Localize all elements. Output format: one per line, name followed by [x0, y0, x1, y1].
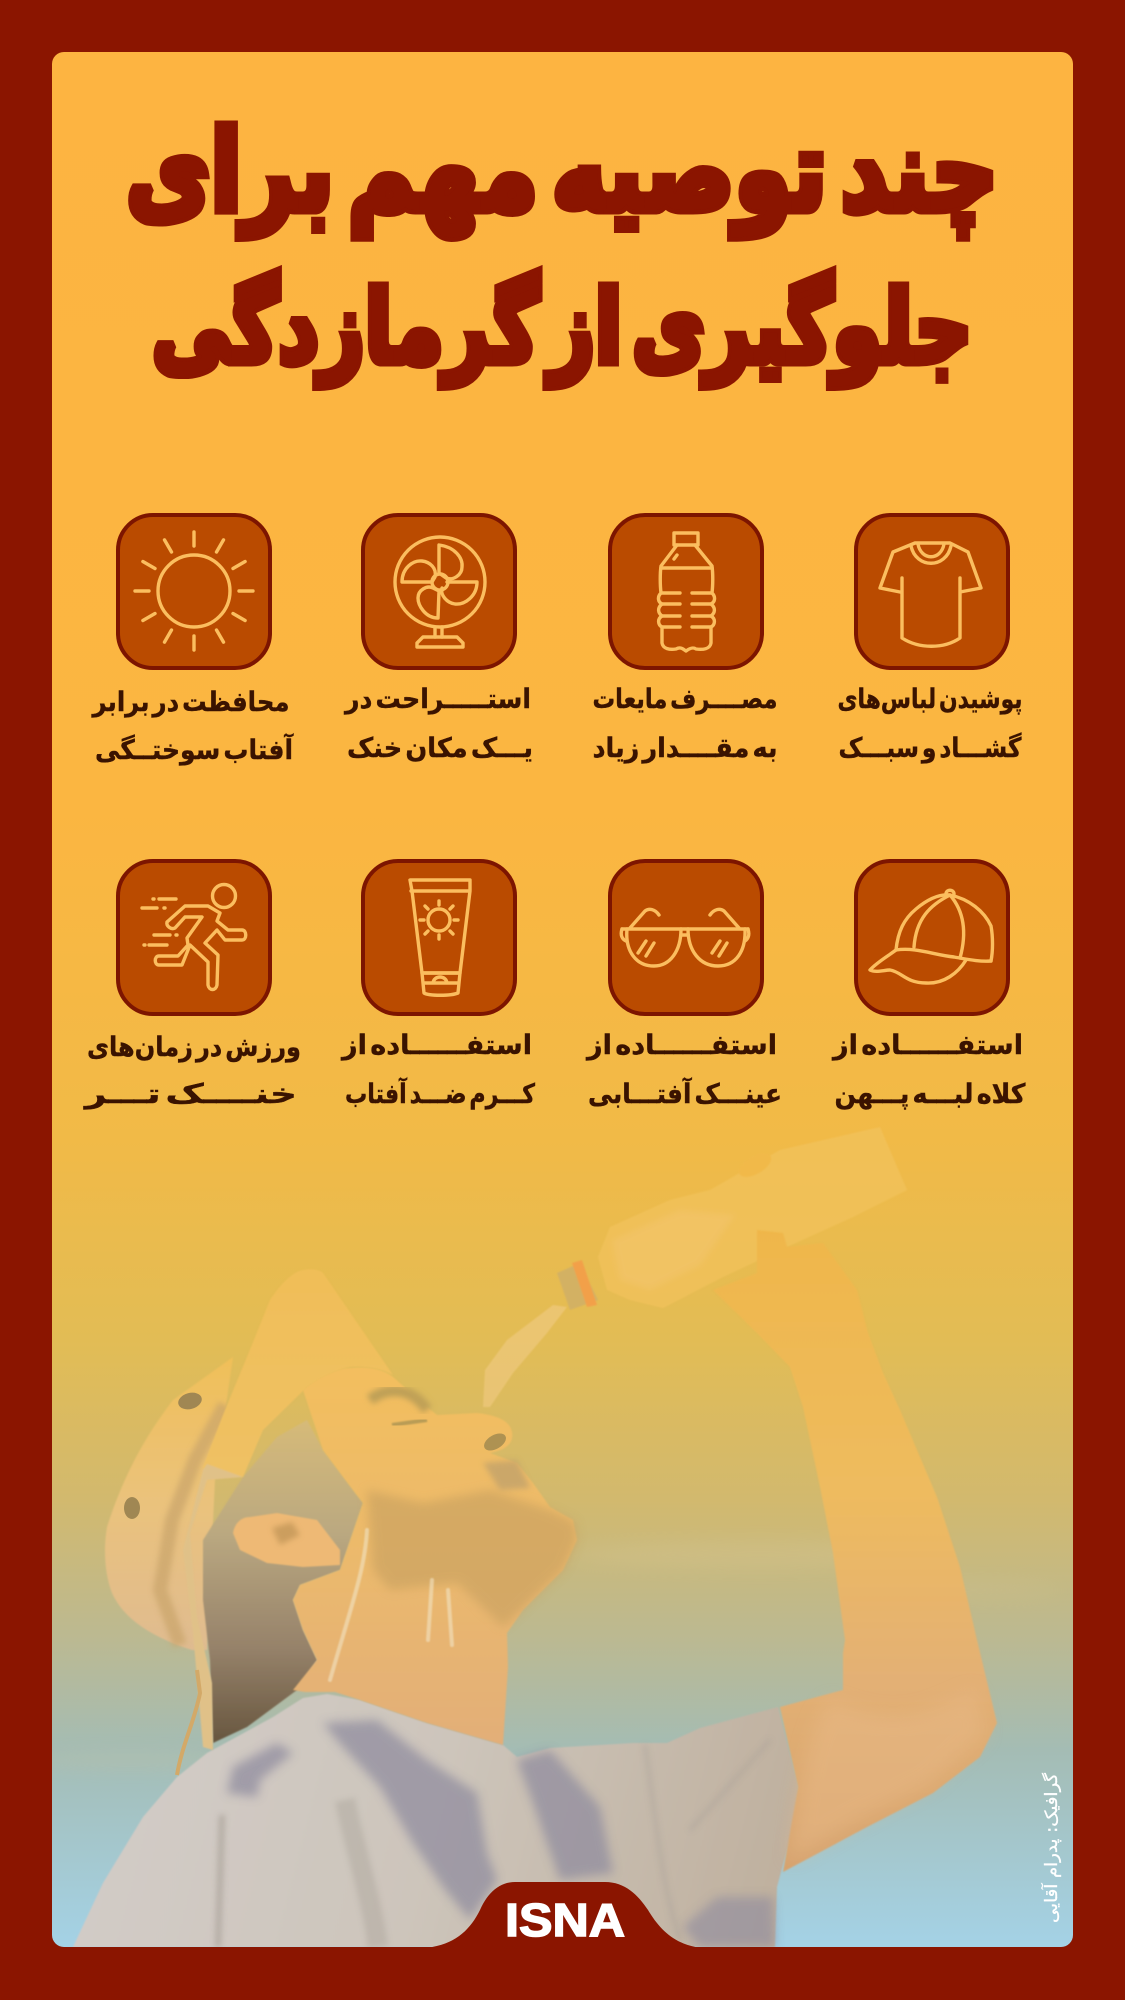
icon: t-shirt [856, 515, 1008, 668]
bottle [557, 1127, 907, 1310]
label: exercise in cooler hours: ورزش در زمان‌های [87, 1032, 301, 1063]
sky clouds [20, 1541, 1060, 1768]
label: drink fluids [592, 684, 778, 764]
label: use wide brim hat: کلاه لبـــه پـــهن [834, 1079, 1026, 1110]
label: rest in a cool place [343, 684, 533, 764]
label: loose clothes [838, 684, 1022, 764]
label: rest in a cool place: یـــک مکان خنک [347, 733, 533, 764]
label: loose clothes: پوشیدن لباس‌های [838, 684, 1022, 715]
label: use sunglasses [585, 1030, 782, 1110]
label: protection from sun [91, 687, 294, 766]
hat brim [183, 1269, 393, 1750]
photo: man drinking water [20, 1127, 1060, 1948]
label: drink fluids: مصــــرف مایعات [592, 684, 778, 715]
water stream [483, 1305, 567, 1407]
label: use sunglasses: استفــــــاده از [585, 1030, 777, 1061]
ISNA badge shape [425, 1882, 702, 1948]
icon: sunglasses [610, 861, 762, 1014]
hat crown [105, 1357, 233, 1650]
logo text: ISNA [505, 1894, 625, 1946]
label: use wide brim hat [831, 1030, 1026, 1110]
hair [203, 1420, 363, 1743]
face and neck [293, 1367, 577, 1745]
label: exercise in cooler hours: خنــــک تـــر [82, 1079, 297, 1110]
label: rest in a cool place: استـــــراحت در [343, 684, 531, 715]
icon: cap [856, 861, 1008, 1014]
credit: گرافیک: پدرام آقایی [1040, 1772, 1062, 1923]
water on neck [330, 1530, 452, 1680]
label: drink fluids: به مقــــدار زیاد [592, 733, 778, 764]
label: protection from sun: محافظت در برابر [91, 687, 290, 718]
label: exercise in cooler hours [82, 1032, 301, 1110]
label: use sunscreen [340, 1030, 535, 1110]
icon: sunscreen tube [363, 861, 515, 1014]
icon: water bottle [610, 515, 762, 668]
label: protection from sun: آفتاب سوختــگی [95, 733, 294, 766]
label: use sunglasses: عینـــک آفتـــابی [588, 1077, 782, 1110]
label: loose clothes: گشـــاد و سبـــک [838, 732, 1022, 764]
icon: fan [363, 515, 515, 668]
arm and hand [713, 1230, 997, 1872]
label: use sunscreen: کـــرم ضـــد آفتاب [345, 1077, 535, 1110]
title [126, 107, 998, 387]
label: use sunscreen: استفــــــاده از [340, 1030, 532, 1061]
label: use wide brim hat: استفــــــاده از [831, 1030, 1023, 1061]
icon: sun [118, 515, 270, 668]
shirt [73, 1694, 798, 1947]
icon: runner [118, 861, 270, 1014]
ear [233, 1513, 340, 1567]
hat strap [177, 1670, 200, 1775]
